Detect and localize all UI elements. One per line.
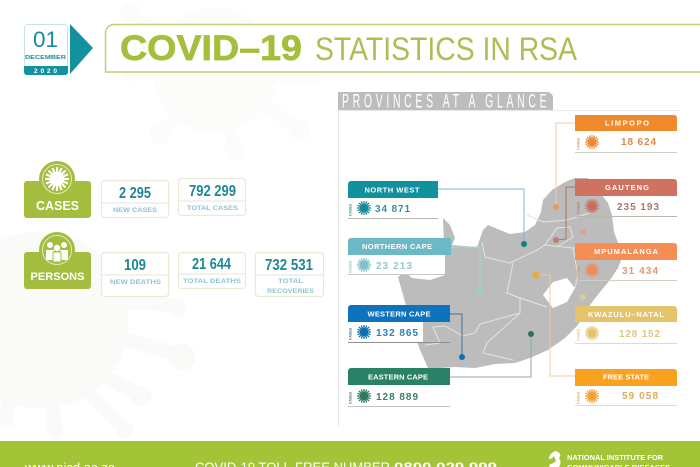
persons badge: PERSONS (30, 271, 84, 283)
stat: new deaths (102, 252, 168, 296)
footer: NATIONAL INSTITUTE FOR (567, 453, 664, 462)
province: KwaZulu-Natal: 128 152 (619, 329, 660, 340)
province: Limpopo: LIMPOPO (605, 118, 649, 128)
date badge: DECEMBER (25, 55, 66, 61)
province: Limpopo (575, 115, 677, 152)
province: Western Cape: CASES (348, 327, 352, 340)
title (106, 24, 700, 72)
stat: total cases: 792 299 (189, 183, 236, 200)
stat: total cases: TOTAL CASES (187, 205, 239, 212)
province: Northern Cape (348, 238, 451, 274)
province: Free State (575, 369, 677, 406)
background virus watermarks (0, 2, 320, 438)
province: Eastern Cape (348, 368, 450, 406)
province: Eastern Cape: CASES (348, 391, 352, 404)
stat: total deaths: TOTAL DEATHS (183, 278, 242, 285)
date badge (24, 24, 68, 75)
stat: total deaths: 21 644 (192, 256, 231, 273)
province: Mpumalanga: MPUMALANGA (594, 247, 659, 256)
stat: total recoveries (256, 252, 324, 296)
date badge: 2020 (34, 68, 57, 75)
province: Northern Cape: CASES (348, 260, 352, 273)
province: Mpumalanga (575, 243, 677, 280)
province: Mpumalanga: 31 434 (622, 266, 658, 277)
province: KwaZulu-Natal: CASES (576, 328, 580, 341)
date badge: 01 (33, 27, 58, 52)
connectors and dots (438, 123, 586, 377)
province: North West: NORTH WEST (364, 186, 420, 194)
footer (0, 441, 700, 467)
province: Eastern Cape: 128 889 (376, 392, 418, 403)
province: Western Cape: WESTERN CAPE (368, 310, 430, 318)
province: Gauteng: 235 193 (617, 202, 659, 213)
province: KwaZulu-Natal (575, 306, 677, 344)
stat: total recoveries: TOTAL (278, 278, 303, 285)
province: Eastern Cape: EASTERN CAPE (368, 372, 428, 382)
province: Gauteng: GAUTENG (605, 183, 649, 192)
persons badge (24, 232, 91, 289)
province: Free State: FREE STATE (603, 372, 649, 382)
stat: new deaths: NEW DEATHS (110, 279, 162, 286)
province: North West: CASES (348, 203, 352, 216)
province: Northern Cape: 23 213 (376, 261, 412, 272)
arrow (70, 24, 93, 74)
stat: new cases (102, 180, 168, 218)
cases badge (24, 161, 91, 218)
stat: total cases (178, 178, 246, 216)
province: Gauteng: CASES (576, 201, 580, 214)
province: Limpopo: CASES (576, 137, 580, 150)
province: North West (348, 181, 438, 218)
province: KwaZulu-Natal: KWAZULU–NATAL (588, 310, 664, 319)
cases badge: CASES (36, 199, 79, 213)
province: Gauteng (575, 179, 677, 216)
province: Free State: CASES (576, 391, 580, 404)
stat: new cases: NEW CASES (113, 207, 158, 214)
title: STATISTICS IN RSA (315, 31, 578, 67)
province: Free State: 59 058 (622, 391, 658, 402)
provinces heading: PROVINCES AT A GLANCE (342, 91, 547, 112)
stat: new cases: 2 295 (119, 185, 151, 202)
province: Mpumalanga: CASES (576, 265, 580, 278)
province: Western Cape (348, 305, 450, 342)
stat: total recoveries: 732 531 (265, 257, 313, 274)
province: Northern Cape: NORTHERN CAPE (362, 242, 432, 251)
title: COVID–19 (120, 29, 302, 68)
stat: new deaths: 109 (124, 257, 146, 274)
province: Limpopo: 18 624 (621, 137, 656, 148)
white panels behind left province rows (348, 255, 445, 342)
map of South Africa (398, 178, 622, 368)
province: Western Cape: 132 865 (376, 328, 418, 339)
stat: total deaths (178, 252, 246, 288)
stat: total recoveries: RECOVERIES (267, 288, 315, 295)
province: North West: 34 871 (375, 204, 410, 215)
